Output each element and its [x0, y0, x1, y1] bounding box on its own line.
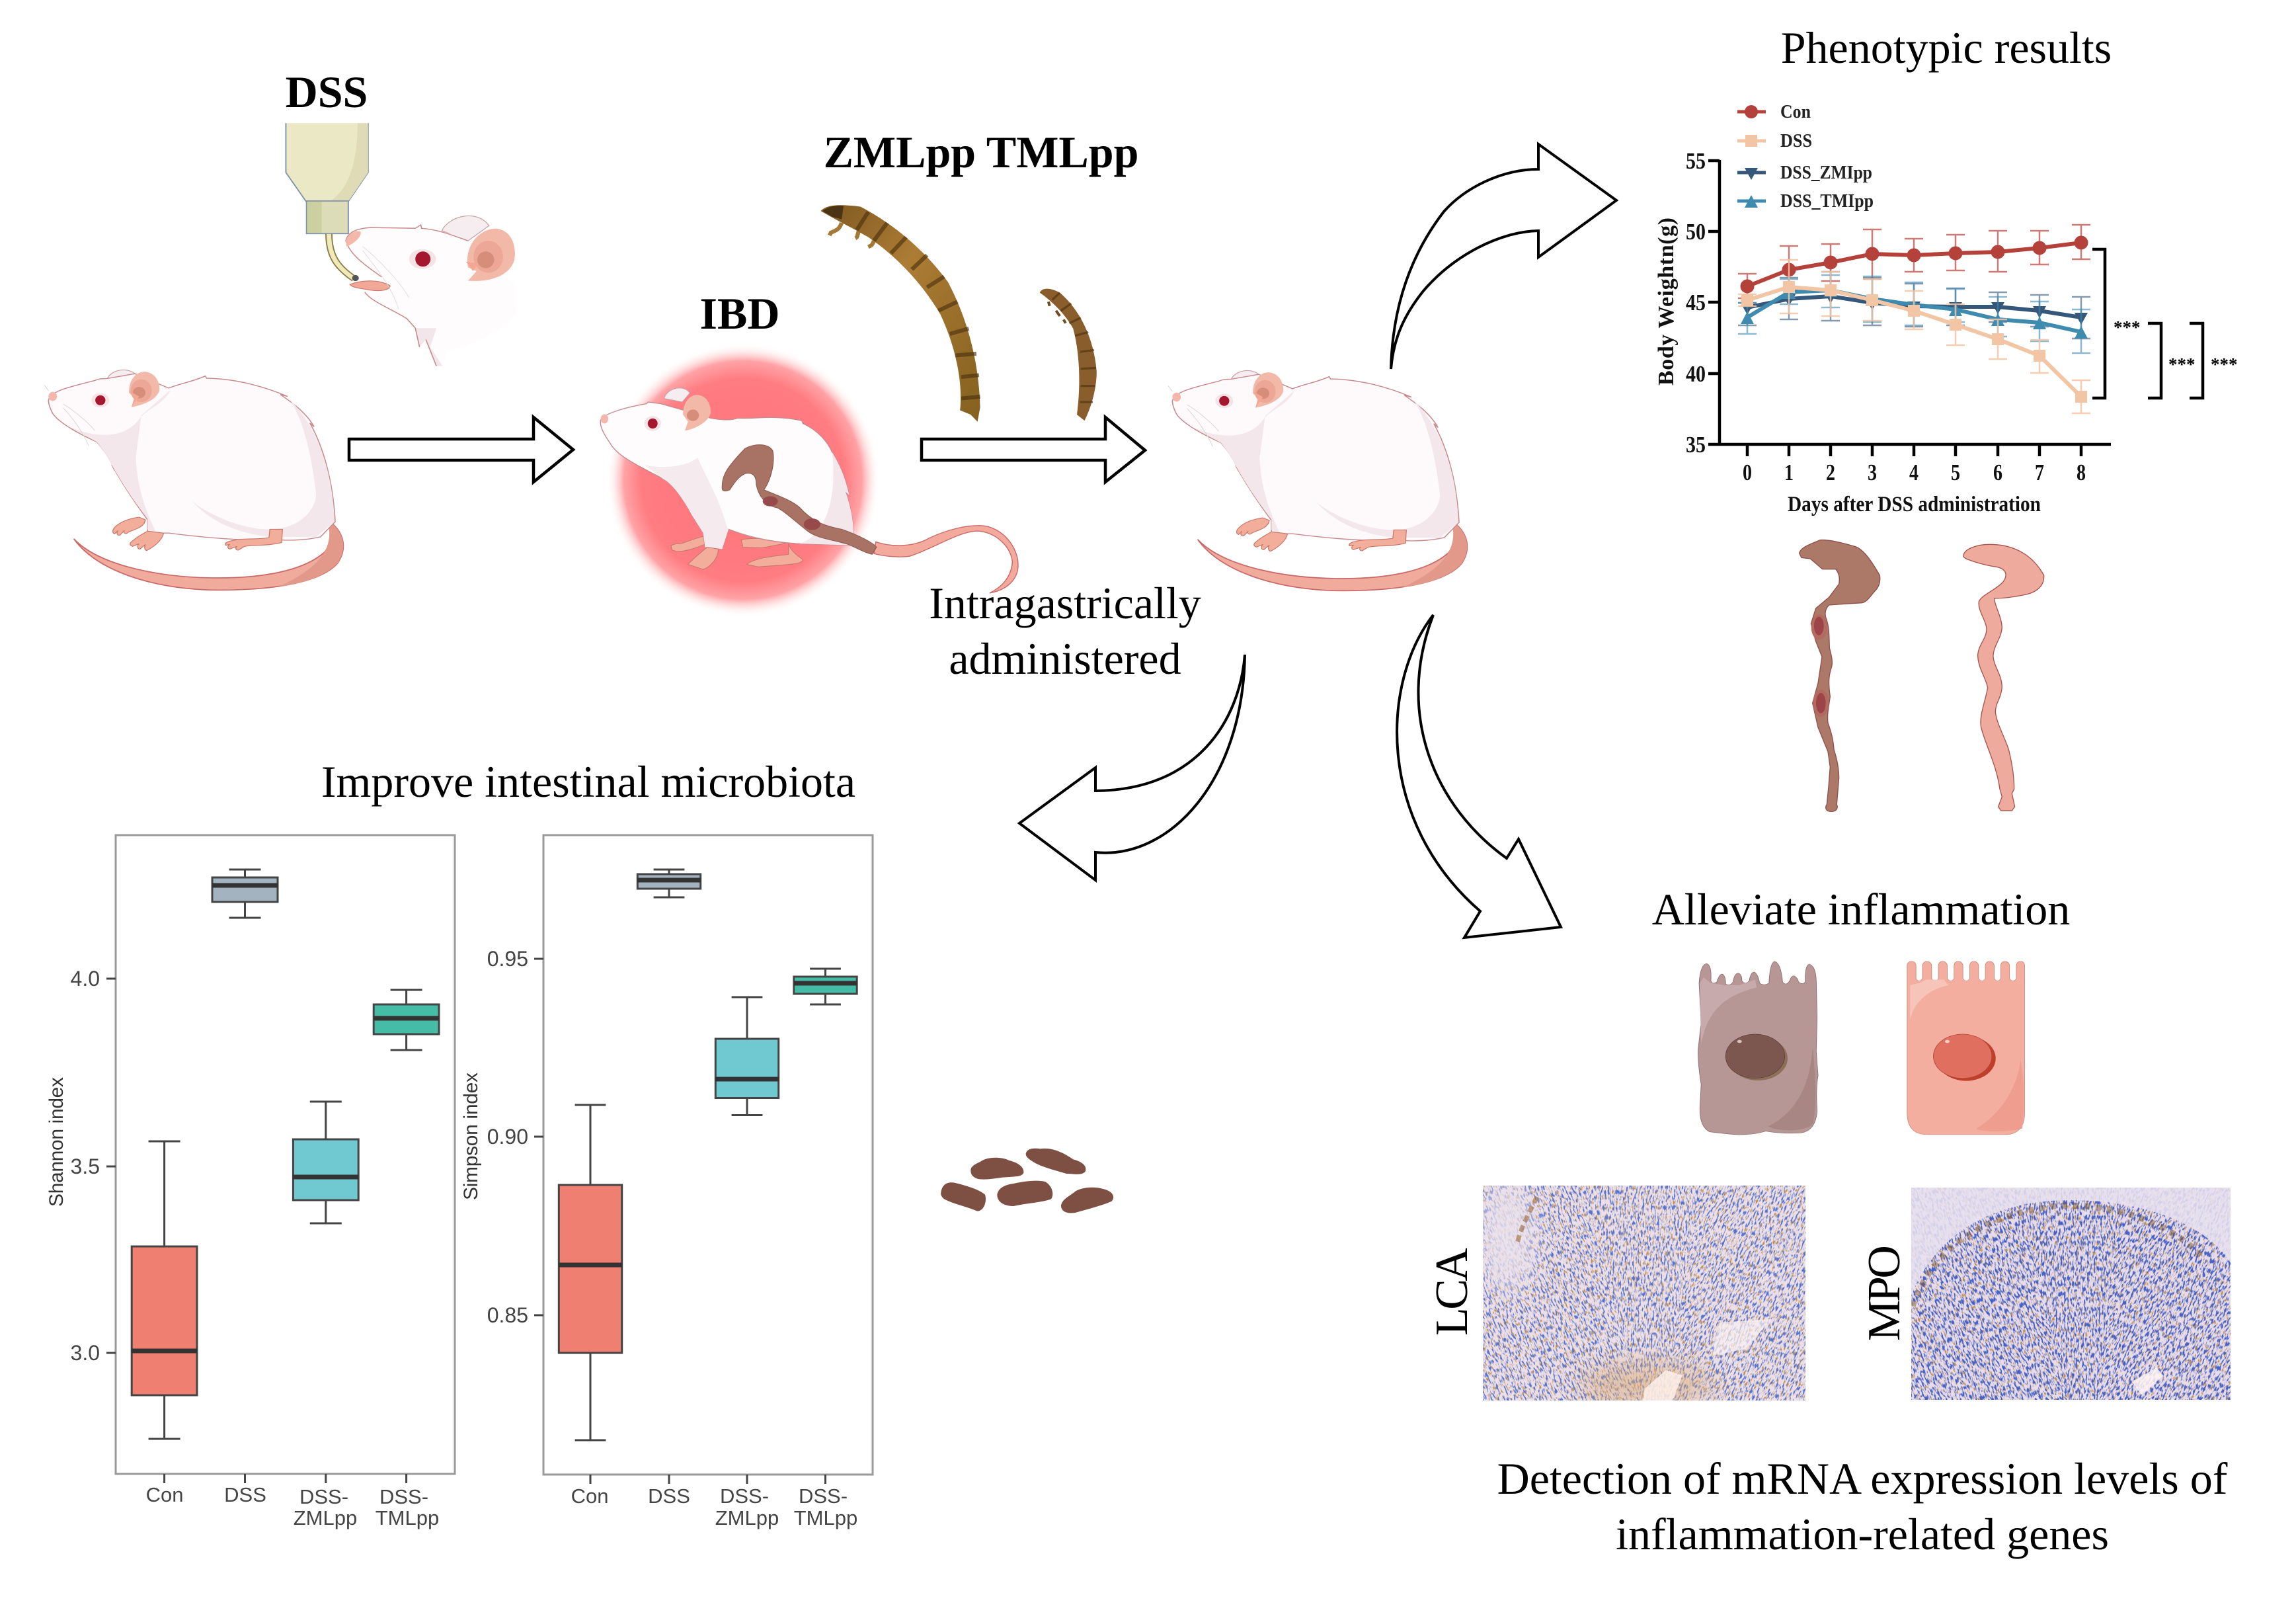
y axis title: Body Weightn(g) [1654, 218, 1679, 386]
x tick labels [146, 1483, 439, 1529]
text: detection of mRNA expression: inflammation-related genes [1616, 1509, 2109, 1559]
y tick labels: 4.0 [71, 967, 100, 991]
heading: alleviate inflammation: Alleviate inflammation [1652, 884, 2070, 934]
icon: feces pellets [941, 1149, 1113, 1213]
label: intragastrically administered: Intragastrically [929, 578, 1201, 628]
icon: healthy epithelial cell [1907, 961, 2024, 1135]
icon: damaged epithelial cell [1698, 961, 1818, 1135]
icon: water bottle [286, 123, 368, 281]
y tick labels: 0.90 [487, 1125, 528, 1149]
y tick labels [1686, 148, 1706, 458]
box: Con [132, 1141, 197, 1439]
heading: improve intestinal microbiota: Improve intestinal microbiota [321, 756, 855, 807]
arrow: curved to inflammation [1397, 615, 1561, 938]
legend: DSS_TMIpp [1780, 190, 1874, 212]
icon: rat head drinking [346, 216, 516, 366]
box: DSS-ZMLpp [715, 997, 779, 1115]
significance brackets: *** [2114, 317, 2141, 337]
y tick labels [71, 967, 100, 1365]
label: MPO: MPO [1859, 1245, 1910, 1341]
icon: IBD rat [600, 388, 1018, 593]
y tick labels: 55 [1686, 148, 1706, 174]
box: DSS-TMLpp [374, 990, 439, 1050]
series: Con [1738, 225, 2090, 298]
legend: DSS [1780, 130, 1812, 151]
icon: healthy rat [44, 370, 343, 590]
series: DSS [1738, 260, 2090, 413]
x tick labels: 7 [2035, 460, 2044, 485]
inflamed intestine in rat [722, 445, 877, 554]
heading: DSS: DSS [286, 67, 368, 117]
x tick labels: DSS- [299, 1485, 348, 1508]
x tick labels: 3 [1868, 460, 1877, 485]
axes [1708, 160, 2111, 456]
x tick labels: 4 [1909, 460, 1919, 485]
icon: large mealworm ZMLpp [821, 205, 980, 422]
x tick labels: ZMLpp [715, 1506, 779, 1529]
significance brackets: *** [2168, 354, 2195, 374]
arrow: healthy to IBD [349, 417, 573, 482]
heading: ZMLpp TMLpp: ZMLpp TMLpp [824, 127, 1138, 177]
x tick labels: TMLpp [794, 1506, 857, 1529]
y tick labels: 50 [1686, 219, 1706, 245]
x tick labels: DSS [224, 1483, 266, 1506]
y tick labels: 45 [1686, 290, 1706, 315]
micrograph: LCA [1483, 1186, 1805, 1401]
inflammation glow [606, 343, 880, 617]
box: Con [559, 1105, 622, 1440]
x tick labels: DSS- [379, 1485, 428, 1508]
arrow: curved to phenotypic results [1391, 144, 1616, 369]
x tick labels [1743, 460, 2086, 485]
icon: inflamed intestine [1800, 540, 1880, 811]
legend [1737, 101, 1874, 212]
arrow: curved to microbiota [1019, 655, 1245, 880]
x tick labels: 5 [1951, 460, 1960, 485]
x tick labels: DSS [648, 1484, 690, 1508]
y axis title: Shannon index [46, 1077, 67, 1207]
x tick labels: 6 [1993, 460, 2002, 485]
arrow: IBD to treated [922, 417, 1145, 482]
y tick labels: 0.95 [487, 947, 528, 971]
x tick labels: Con [571, 1484, 608, 1508]
text: detection of mRNA expression: Detection of mRNA expression levels of [1497, 1453, 2228, 1504]
x tick labels [571, 1484, 857, 1529]
x tick labels: 8 [2077, 460, 2086, 485]
y axis title: Simpson index [460, 1073, 482, 1200]
series: DSS_ZMIpp [1738, 272, 2090, 339]
y tick labels: 35 [1686, 432, 1706, 458]
x tick labels: TMLpp [376, 1506, 439, 1529]
significance brackets [2092, 249, 2237, 398]
box plot: Simpson index [460, 835, 873, 1529]
icon: treated rat [1168, 370, 1467, 590]
y tick labels: 0.85 [487, 1303, 528, 1327]
box: DSS-ZMLpp [293, 1102, 358, 1223]
box: DSS [212, 870, 278, 918]
x tick labels: DSS- [720, 1484, 769, 1508]
x tick labels: 0 [1743, 460, 1752, 485]
x tick labels: DSS- [799, 1484, 848, 1508]
icon: healthy intestine [1963, 544, 2044, 811]
box: DSS [637, 870, 701, 897]
y tick labels: 40 [1686, 361, 1706, 387]
icon: small mealworm TMLpp [1040, 289, 1097, 421]
y tick labels [487, 947, 528, 1327]
heading: phenotypic results: Phenotypic results [1781, 22, 2112, 73]
x tick labels: Con [146, 1483, 183, 1506]
x axis title: Days after DSS administration [1788, 493, 2041, 516]
legend: DSS_ZMIpp [1780, 162, 1872, 183]
x tick labels: ZMLpp [294, 1506, 357, 1529]
x tick labels: 2 [1826, 460, 1835, 485]
legend: Con [1780, 101, 1811, 122]
x tick labels: 1 [1784, 460, 1794, 485]
y tick labels: 3.5 [71, 1155, 100, 1178]
label: intragastrically administered: administered [949, 633, 1181, 684]
box: DSS-TMLpp [794, 969, 857, 1004]
series: DSS_TMIpp [1738, 275, 2090, 353]
significance brackets: *** [2211, 354, 2237, 374]
box plot: Shannon index [46, 835, 455, 1529]
micrograph: MPO [1911, 1188, 2231, 1400]
label: LCA: LCA [1427, 1248, 1478, 1336]
line chart: body weight [1654, 101, 2237, 516]
heading: IBD: IBD [700, 288, 779, 339]
y tick labels: 3.0 [71, 1341, 100, 1365]
